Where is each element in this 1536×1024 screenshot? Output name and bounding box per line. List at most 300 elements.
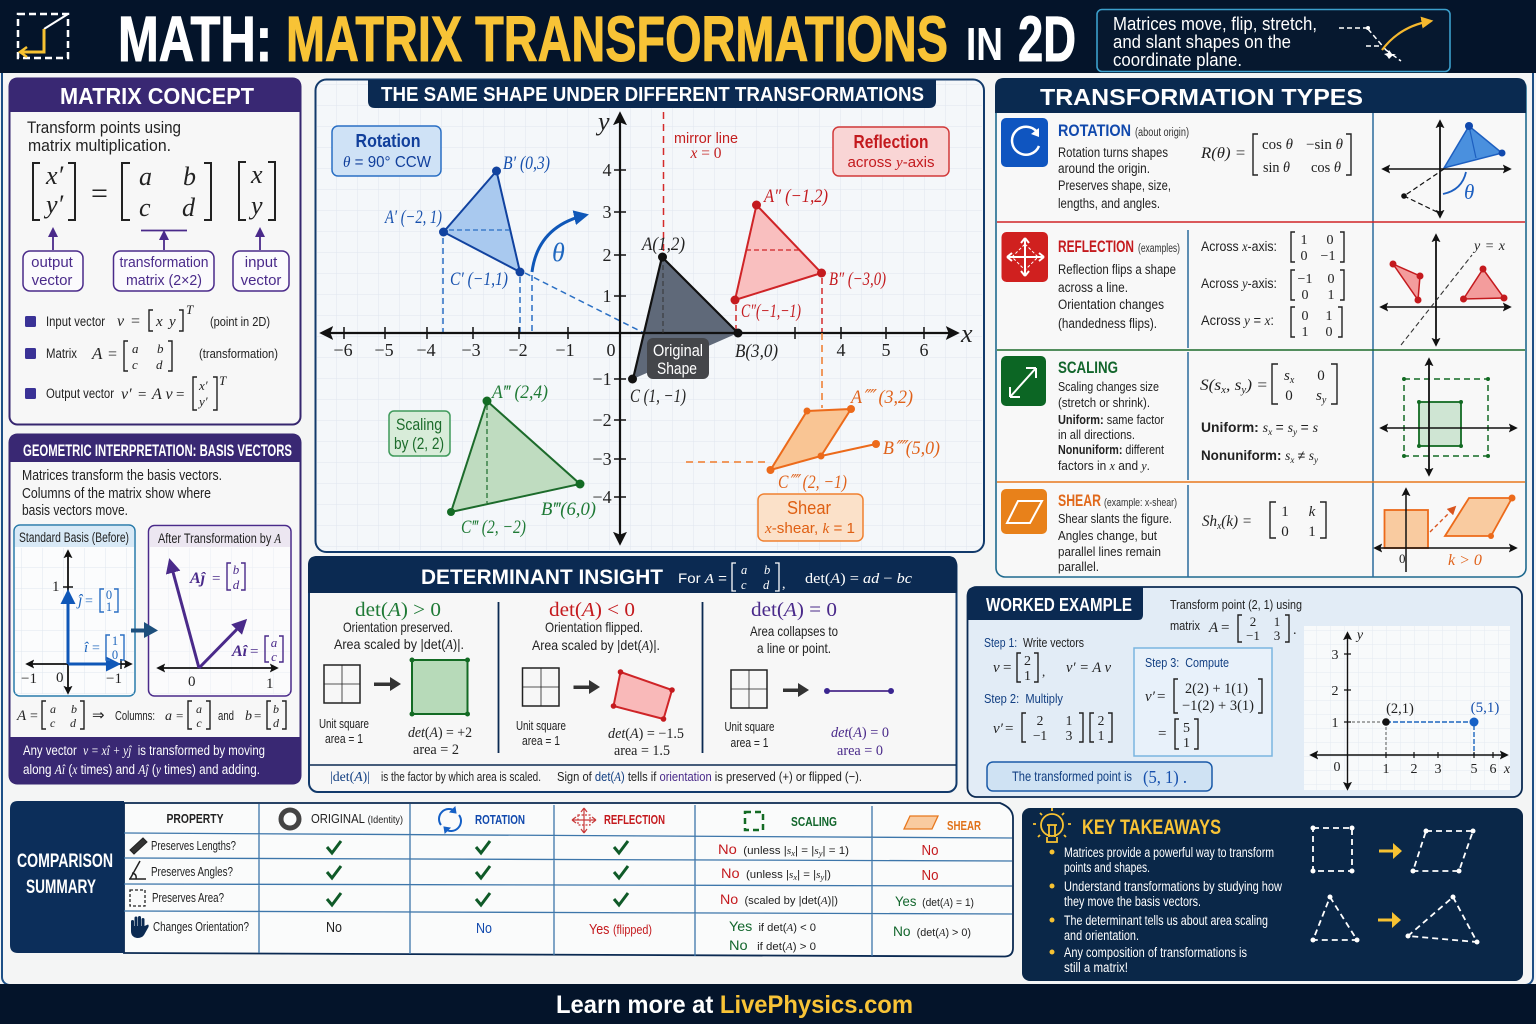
column: determinant positive: Area scaled by |det(A)|. [334, 636, 464, 653]
heading: matrix concept [9, 78, 301, 112]
heading: worked example [967, 587, 1143, 620]
equation: matrix multiplication: a [139, 162, 152, 191]
chart: after transformation [148, 526, 291, 696]
row: shear [1001, 489, 1516, 574]
chart: after transformation: 0 [188, 674, 196, 690]
step 3 [1134, 648, 1272, 756]
formula: columns of the matrix: c [50, 716, 56, 730]
legend: input vector: y [167, 314, 176, 330]
mirror line: mirror line [674, 131, 738, 147]
problem statement: = [1221, 620, 1229, 636]
chart: standard basis before: −1 [106, 671, 122, 687]
note: determinant meaning: |det(A)| [330, 770, 370, 785]
formula: reflection matrices: −1 [1298, 272, 1312, 287]
footer banner [0, 984, 1536, 1024]
chart: coordinate axes [322, 107, 973, 543]
step 1: = [1003, 660, 1011, 676]
chart: standard basis before [14, 525, 135, 696]
formula: columns of the matrix: and [218, 708, 234, 723]
row: reflection: (handedness flips). [1058, 316, 1157, 331]
step 1: 1 [1024, 669, 1031, 684]
label: output vector [23, 251, 83, 291]
legend: output vector: x′ [198, 378, 208, 393]
formula: columns of the matrix: ⇒ [92, 708, 105, 724]
table header: ORIGINAL (Identity) [311, 811, 403, 826]
step 3: = [1158, 726, 1166, 742]
row: rotation: Preserves shape, size, [1058, 178, 1171, 193]
triangle: scaled: C‴ (2, −2) [461, 517, 526, 538]
result callout: (5, 1) . [1143, 767, 1187, 788]
arrow: rotation angle theta [532, 215, 586, 272]
chart: worked example plot: y [1355, 628, 1364, 643]
table header: REFLECTION [604, 812, 665, 827]
label: transformation matrix: matrix (2×2) [126, 272, 202, 289]
chart: coordinate axes: 5 [882, 340, 890, 360]
chart: standard basis before: = [92, 641, 100, 656]
heading: key takeaways: KEY TAKEAWAYS [1082, 816, 1221, 839]
title: IN [966, 18, 1003, 70]
label: original shape: Shape [657, 359, 697, 378]
formula: scaling matrix: y [1313, 455, 1318, 465]
legend: output vector: A v [151, 386, 173, 403]
chart: after transformation: c [271, 649, 277, 664]
formula: shear matrix [1202, 502, 1326, 540]
column: determinant zero: area = 1 [730, 736, 769, 750]
triangle: original shape [628, 234, 778, 407]
callout: subtitle: Matrices move, flip, stretch, [1113, 14, 1317, 34]
formula: scaling matrix: 0 [1317, 368, 1325, 384]
column: scaling values: Yes if det(A) < 0 [729, 918, 816, 934]
heading: determinant insight: c [741, 578, 747, 592]
formula: shear matrix: k [1309, 504, 1316, 520]
row: shear: parallel lines remain [1058, 544, 1161, 559]
panel: matrix concept [9, 78, 301, 424]
legend: scaling: by (2, 2) [394, 434, 444, 453]
row: shear: Angles change, but [1058, 528, 1157, 543]
legend: matrix: d [156, 357, 163, 372]
heading: worked example: WORKED EXAMPLE [986, 595, 1132, 615]
formula: reflection matrices: −1 [1321, 249, 1335, 264]
column: scaling values: s [814, 845, 819, 857]
footer banner: Learn more at LivePhysics.com [556, 991, 913, 1019]
row: reflection: Reflection flips a shape [1058, 262, 1176, 277]
title: MATRIX TRANSFORMATIONS [286, 3, 948, 75]
formula: columns of the matrix: Columns: [115, 708, 155, 723]
step 2: v′ [993, 721, 1004, 737]
formula: columns of the matrix: b [71, 702, 77, 716]
step 2: Step 2: Multiply [984, 691, 1063, 706]
formula: reflection matrices: 0 [1328, 272, 1334, 287]
column: determinant negative: area = 1.5 [614, 743, 670, 759]
problem statement: −1 [1246, 628, 1260, 643]
triangle: reflected [730, 186, 886, 333]
bullet list: The determinant tells us about area scaling [1064, 913, 1268, 928]
panel: basis vectors [9, 434, 301, 784]
formula: scaling matrix: Nonuniform: s [1201, 448, 1290, 463]
chart: coordinate axes: −5 [374, 340, 394, 360]
icon: original ring [281, 810, 299, 828]
equation: matrix multiplication: x′ [45, 161, 64, 190]
column: determinant negative: Area scaled by |det(A)|. [532, 637, 660, 654]
formula: reflection matrices: Across y = x: [1201, 313, 1274, 328]
label: output vector: output [31, 254, 74, 271]
chart: coordinate axes: 3 [602, 202, 612, 222]
formula: shear matrix: 0 [1281, 524, 1289, 540]
legend: input vector [25, 302, 270, 331]
chart: coordinate axes: 2 [602, 245, 612, 265]
vector: A j hat [170, 561, 199, 668]
column: determinant negative: det(A) = −1.5 [608, 726, 684, 742]
label: transformation matrix [114, 251, 214, 291]
row label: preserves area: Preserves Area? [152, 891, 224, 905]
legend: input vector: (point in 2D) [210, 314, 270, 329]
chart: worked example plot: 0 [1334, 760, 1340, 775]
row: reflection: Orientation changes [1058, 297, 1164, 312]
heading: comparison summary: COMPARISON [17, 851, 113, 872]
triangle: original shape: C (1, −1) [630, 386, 686, 407]
chart: standard basis before: î [84, 640, 89, 656]
row: shear: Shear slants the figure. [1058, 511, 1172, 526]
formula: reflection matrices [1201, 232, 1344, 340]
chart: worked example plot: 6 [1490, 762, 1496, 777]
column: determinant zero: Area collapses to [750, 623, 838, 639]
row: scaling: Uniform: same factor [1058, 413, 1164, 427]
row: scaling: Scaling changes size [1058, 380, 1159, 394]
chart: after transformation: = [250, 644, 258, 660]
chart: coordinate axes: −1 [592, 369, 612, 389]
equation: matrix multiplication: b [183, 162, 196, 191]
chart: coordinate axes: −2 [508, 340, 528, 360]
intro text: Columns of the matrix show where [22, 486, 211, 502]
chart: standard basis before: 0 [106, 588, 112, 602]
column: determinant zero: area = 0 [837, 743, 883, 759]
bullet list [1050, 845, 1282, 975]
formula: reflection matrices: Across y-axis: [1201, 276, 1277, 291]
label: output vector: vector [32, 272, 72, 289]
chart: standard basis before: ĵ [76, 592, 84, 609]
panel: key takeaways [1022, 808, 1523, 981]
chart: worked example plot: 3 [1434, 762, 1442, 777]
diagram: reflection: y = x [1472, 239, 1506, 254]
table header: ROTATION [475, 812, 525, 827]
column: determinant positive [319, 599, 472, 758]
formula: scaling matrix: x [1289, 375, 1295, 386]
row label: preserves angles [129, 861, 233, 879]
legend: output vector: v′ [121, 386, 132, 403]
row: reflection [1002, 232, 1510, 345]
column: determinant negative [516, 599, 684, 759]
chart: standard basis before: = [85, 594, 93, 609]
equation: matrix multiplication [33, 160, 275, 222]
arrow [574, 680, 600, 694]
step 2: −1 [1033, 728, 1047, 743]
legend: input vector: v [117, 313, 125, 330]
bullet list: they move the basis vectors. [1064, 894, 1201, 909]
column: scaling values: No (unless |s [718, 841, 791, 857]
shape: scaled square [410, 658, 470, 716]
icon: shear [1001, 489, 1047, 534]
diagram: rotation [1383, 121, 1510, 217]
row: rotation: ROTATION [1058, 121, 1131, 140]
vector: A i hat [199, 621, 245, 668]
chart: coordinate axes: −2 [592, 410, 612, 430]
heading: determinant insight: a [741, 563, 747, 577]
formula: scaling matrix: x [1289, 455, 1294, 465]
chart: standard basis before: 1 [52, 579, 60, 595]
diagram: scaling [1381, 359, 1516, 475]
step 3: −1(2) + 3(1) [1182, 698, 1254, 714]
formula: scaling matrix: S(s [1200, 377, 1221, 394]
formula: scaling matrix: , [1226, 377, 1235, 394]
legend: input vector: = [131, 313, 140, 330]
result callout [987, 762, 1212, 791]
step 3: 5 [1183, 721, 1190, 736]
formula: rotation matrix: sin θ [1263, 160, 1290, 176]
arrows to labels [53, 229, 260, 250]
legend: input vector: Input vector [46, 314, 105, 329]
triangle: reflected: C″(−1,−1) [741, 301, 801, 322]
chart: coordinate axes: 4 [836, 340, 846, 360]
row: scaling: Nonuniform: different [1058, 443, 1164, 457]
intro text: Transform points using [27, 118, 181, 137]
legend: matrix: (transformation) [199, 346, 278, 361]
panel: determinant insight [308, 556, 957, 792]
chart: coordinate axes: y [595, 107, 610, 136]
bullet list: and orientation. [1064, 928, 1139, 943]
triangle: original shape: B(3,0) [735, 341, 778, 362]
vector: j hat [66, 592, 70, 664]
triangle: scaled: A‴ (2,4) [490, 382, 548, 403]
formula: columns of the matrix: d [273, 716, 280, 730]
chart: standard basis before: −1 [21, 671, 37, 687]
legend: rotation [332, 126, 441, 176]
chart: after transformation: d [233, 577, 240, 592]
formula: reflection matrices: 1 [1328, 288, 1334, 303]
intro text: basis vectors move. [22, 503, 128, 519]
chart: after transformation: b [233, 562, 240, 577]
equation: matrix multiplication: = [91, 177, 108, 210]
shape: collapsed line [824, 688, 894, 694]
row: scaling: (stretch or shrink). [1058, 396, 1150, 410]
shape: unit square [522, 668, 559, 706]
column: scaling values: |) [824, 869, 831, 881]
chart: after transformation: 1 [266, 676, 274, 692]
formula: scaling matrix: ) = [1245, 377, 1268, 394]
row: shear: SHEAR [1058, 491, 1101, 510]
formula: reflection matrices: 0 [1302, 309, 1308, 324]
problem statement: 2 [1250, 614, 1256, 629]
bullet list: points and shapes. [1064, 860, 1150, 875]
row: changes orientation values: No [476, 921, 492, 937]
row: rotation: lengths, and angles. [1058, 196, 1160, 211]
mirror line [664, 112, 738, 252]
column: scaling values: No if det(A) > 0 [729, 937, 816, 953]
row: rotation: (about origin) [1135, 127, 1189, 139]
row: reflection: REFLECTION [1058, 237, 1134, 256]
column: determinant zero: a line or point. [757, 640, 831, 656]
chart: coordinate axes: −6 [333, 340, 353, 360]
legend: output vector: y′ [197, 394, 208, 409]
chart: coordinate axes: 6 [920, 340, 928, 360]
legend: matrix: A [91, 344, 103, 363]
chart: coordinate axes: −4 [592, 487, 612, 507]
triangle: rotated: A′ (−2, 1) [383, 207, 442, 228]
row label: changes orientation: Changes Orientation? [153, 920, 249, 934]
legend: matrix: c [132, 357, 138, 372]
heading: determinant insight: det(A) = ad − bc [805, 571, 912, 587]
problem statement: 1 [1274, 614, 1280, 629]
chart: worked example plot [1304, 626, 1511, 790]
legend: shear: x-shear, k = 1 [764, 520, 855, 537]
step 2: 1 [1066, 713, 1072, 728]
row: scaling [1001, 356, 1516, 475]
column: scaling values: s [816, 869, 821, 881]
column: scaling values [718, 841, 849, 953]
column: determinant positive: area = 1 [325, 732, 363, 746]
formula: scaling matrix: s [1235, 377, 1241, 394]
step 2 [984, 691, 1112, 743]
panel: transformation types [995, 78, 1526, 577]
formula: shear matrix: x [1216, 521, 1222, 532]
step 1: v [993, 660, 1000, 676]
formula: scaling matrix: Uniform: s [1201, 420, 1268, 435]
step 3: 2(2) + 1(1) [1185, 681, 1248, 697]
column: scaling values: x [792, 873, 798, 882]
callout: any vector [9, 737, 301, 784]
heading: determinant insight: DETERMINANT INSIGHT [421, 566, 663, 589]
problem statement: A [1208, 620, 1219, 636]
column: determinant zero: Unit square [724, 720, 775, 734]
equation: matrix multiplication: d [182, 193, 196, 222]
icon: moving point [1339, 21, 1431, 61]
row: reflection: (examples) [1138, 243, 1180, 255]
formula: columns of the matrix: = [254, 708, 261, 723]
icon: reflection [1002, 232, 1048, 282]
panel: same shape under different transformations [316, 80, 984, 552]
formula: reflection matrices: 0 [1326, 233, 1334, 248]
label: input vector: input [245, 254, 278, 271]
diagram: square to parallelogram [1310, 826, 1476, 874]
formula: columns of the matrix: a [50, 702, 56, 716]
arrow: before to after [131, 622, 158, 638]
chart: standard basis before: 0 [112, 648, 118, 662]
formula: reflection matrices: 1 [1302, 325, 1308, 340]
label: input vector [233, 251, 289, 291]
chart: coordinate axes: −3 [461, 340, 481, 360]
legend: matrix [25, 341, 278, 372]
shape: sheared: A⁗ (3,2) [849, 387, 913, 408]
column: shear values [893, 843, 974, 939]
shape: sheared: C⁗ (2, −1) [778, 472, 847, 493]
step 3: 1 [1183, 736, 1190, 751]
heading: matrix concept: MATRIX CONCEPT [60, 83, 254, 109]
step 1: , [1042, 664, 1045, 679]
row label: preserves lengths: Preserves Lengths? [151, 839, 236, 853]
table header: PROPERTY [166, 811, 224, 826]
column: determinant positive: area = 2 [413, 742, 459, 758]
chart: standard basis before: 1 [112, 634, 118, 648]
note: determinant meaning [330, 769, 862, 785]
formula: shear matrix: k) = [1226, 513, 1253, 530]
row: scaling: in all directions. [1058, 428, 1135, 442]
chart: worked example plot: 3 [1332, 648, 1338, 663]
problem statement: Transform point (2, 1) using [1170, 597, 1302, 612]
diagram: shear: 0 [1399, 551, 1406, 566]
triangle: rotated: B′ (0,3) [503, 153, 550, 174]
callout: subtitle [1097, 10, 1450, 72]
chart: worked example plot: 1 [1382, 762, 1390, 777]
shape: sheared: B⁗(5,0) [883, 438, 940, 459]
heading: determinant insight: For A = [678, 570, 727, 587]
icon: scaling [1001, 356, 1046, 406]
chart: after transformation: = [212, 571, 220, 587]
triangle: scaled: B‴(6,0) [541, 499, 596, 520]
heading: transformation types: TRANSFORMATION TYPES [1040, 84, 1363, 110]
row: reflection: across a line. [1058, 280, 1128, 295]
label: original shape: Original [653, 341, 703, 360]
column: determinant negative: Unit square [516, 719, 566, 733]
heading: comparison summary: SUMMARY [26, 877, 96, 898]
chart: worked example plot: (2,1) [1386, 701, 1414, 717]
heading: basis vectors: GEOMETRIC INTERPRETATION: BASIS VECTORS [23, 441, 292, 460]
column: determinant positive: Unit square [319, 717, 369, 731]
row label: preserves lengths [130, 838, 236, 854]
formula: columns of the matrix: = [176, 708, 183, 723]
problem statement: 3 [1274, 628, 1280, 643]
shape: sheared [686, 333, 940, 493]
chart: coordinate axes: 4 [602, 160, 612, 180]
icon: matrix transform square [18, 14, 68, 58]
legend: output vector: = [138, 387, 146, 403]
legend: matrix: a [132, 341, 139, 356]
column: determinant positive: det(A) > 0 [355, 599, 441, 621]
intro text [27, 118, 181, 155]
panel: worked example [967, 587, 1522, 797]
chart: after transformation: a [271, 635, 278, 650]
table header: SHEAR [947, 818, 981, 833]
icon: shear parallelogram [904, 816, 938, 829]
formula: columns of the matrix: b⃗ [245, 709, 263, 724]
step 1: v′ = A v [1066, 660, 1111, 676]
formula: columns of the matrix: b [273, 702, 279, 716]
note: determinant meaning: is the factor by which area is scaled. [381, 769, 541, 784]
formula: scaling matrix: y [1240, 385, 1247, 396]
chart: worked example plot: 5 [1470, 762, 1478, 777]
arrow [783, 683, 809, 697]
diagram: triangle to triangle [1310, 894, 1480, 944]
formula: reflection matrices: 0 [1302, 288, 1308, 303]
legend: output vector [25, 373, 227, 410]
equation: matrix multiplication: x [250, 160, 263, 189]
diagram: rotation: θ [1464, 180, 1474, 204]
row: rotation: around the origin. [1058, 161, 1150, 176]
chart: worked example plot: (5,1) [1471, 700, 1499, 716]
table header: SCALING [791, 814, 837, 829]
icon: light bulb [1033, 808, 1071, 842]
formula: scaling matrix: s [1316, 388, 1322, 404]
triangle: reflected: A″ (−1,2) [762, 186, 828, 207]
formula: columns of the matrix: a⃗ [165, 709, 183, 724]
legend: matrix: b [157, 341, 164, 356]
diagram: shear: k > 0 [1448, 552, 1482, 569]
heading: determinant insight: d [763, 578, 770, 592]
row: shear: (example: x-shear) [1104, 497, 1177, 509]
bullet list: Any composition of transformations is [1064, 945, 1247, 960]
arrow [374, 677, 401, 691]
legend: rotation: Rotation [356, 131, 420, 151]
step 2: 2 [1037, 713, 1043, 728]
legend: output vector: T [219, 373, 227, 388]
